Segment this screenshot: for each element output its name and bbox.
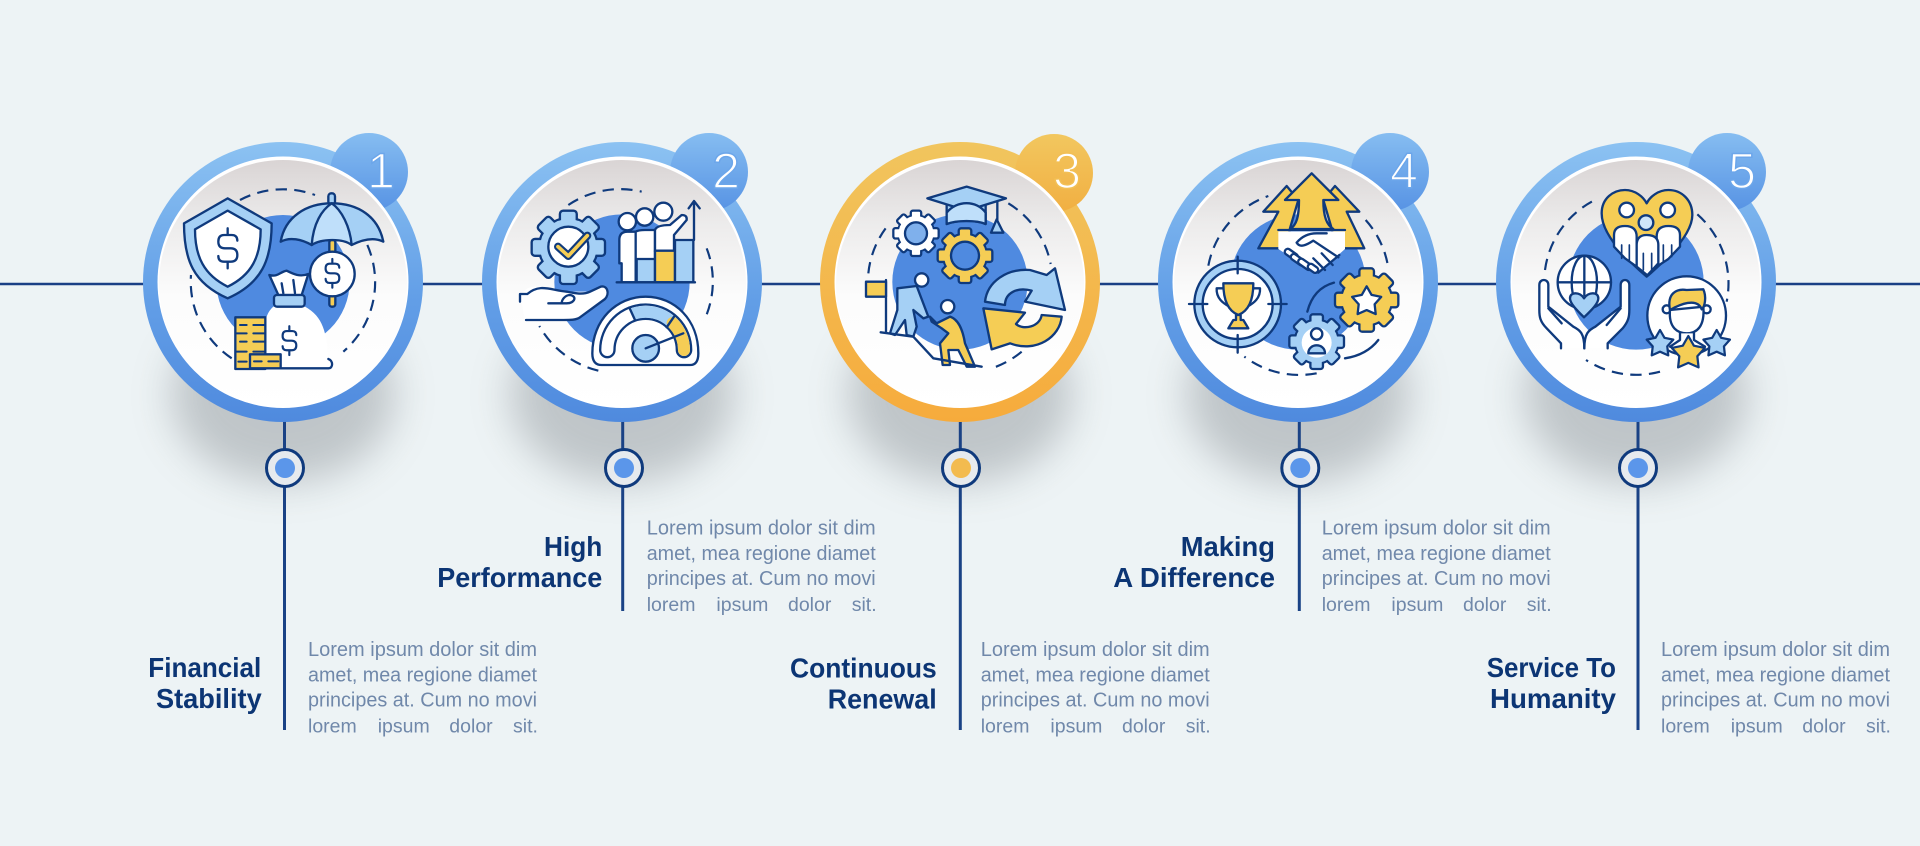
step 5 description: lorem	[1661, 716, 1710, 738]
step 4 description	[1322, 517, 1552, 616]
step 1 description: Lorem ipsum dolor sit dim	[308, 639, 537, 661]
step 3 description: principes at. Cum no movi	[981, 690, 1210, 712]
step 3 description: dolor	[1122, 716, 1166, 738]
step 1 connector	[283, 415, 286, 730]
step 3 ring	[820, 142, 1100, 422]
step 4 title: Making	[1181, 531, 1275, 562]
step 1 badge: 1	[367, 143, 395, 199]
step 4 description: dolor	[1463, 594, 1507, 616]
step 2 drop shadow	[510, 307, 734, 483]
step 2 description: Lorem ipsum dolor sit dim	[647, 517, 876, 539]
step 4 description: amet, mea regione diamet	[1322, 543, 1551, 565]
step 5 description: amet, mea regione diamet	[1661, 665, 1890, 687]
step 2 badge: 2	[712, 143, 740, 199]
step 5 panel: service to humanity	[1487, 133, 1891, 738]
step 2 description: lorem	[647, 594, 695, 616]
step 1 description: amet, mea regione diamet	[308, 665, 537, 687]
step 1 panel: financial stability	[143, 133, 538, 738]
step 5 title	[1487, 652, 1616, 714]
step 3 badge	[1015, 134, 1093, 212]
step 1 description: lorem	[308, 716, 357, 738]
step 2 title	[437, 531, 602, 593]
step 1 title: Financial	[148, 652, 261, 683]
step 3 description: lorem	[981, 716, 1029, 738]
step 2 badge	[670, 133, 748, 211]
step 5 description: Lorem ipsum dolor sit dim	[1661, 639, 1890, 661]
step 2 title: Performance	[437, 562, 602, 593]
step 3 drop shadow	[848, 307, 1072, 483]
icon: shield, umbrella, money bag	[184, 189, 383, 369]
step 5 description: dolor	[1802, 716, 1846, 738]
step 2 description	[647, 517, 877, 616]
step 1 title	[148, 652, 262, 714]
step 1 drop shadow	[171, 307, 395, 483]
step 1 inner disc	[158, 156, 408, 408]
step 1 description: sit.	[513, 716, 538, 738]
step 3 connector	[959, 415, 962, 730]
step 3 title: Continuous	[790, 652, 937, 683]
step 3 title	[790, 652, 937, 714]
step 4 description: lorem	[1322, 594, 1370, 616]
step 2 panel: high performance	[437, 133, 877, 616]
step 4 description: sit.	[1527, 594, 1552, 616]
step 5 connector	[1636, 415, 1640, 730]
step 1 description: dolor	[449, 716, 493, 738]
step 5 inner disc	[1510, 156, 1762, 408]
step 4 node	[1282, 450, 1319, 486]
step 2 title: High	[544, 531, 602, 562]
step 4 ring	[1158, 142, 1438, 422]
step 5 title: Humanity	[1490, 683, 1616, 714]
step 2 ring	[482, 142, 762, 422]
step 5 description	[1661, 639, 1891, 738]
step 5 node	[1620, 450, 1656, 486]
step 3 node	[942, 450, 980, 486]
step 2 description: dolor	[788, 594, 832, 616]
step 4 drop shadow	[1186, 307, 1410, 483]
horizontal timeline line	[0, 283, 1920, 285]
step 1 ring	[143, 142, 423, 422]
step 4 badge	[1351, 133, 1429, 211]
step 2 description: sit.	[852, 594, 877, 616]
step 3 inner disc	[834, 156, 1086, 408]
step 1 description: ipsum	[378, 716, 430, 738]
step 4 title: A Difference	[1113, 562, 1275, 593]
step 1 badge	[330, 133, 408, 211]
step 1 node	[266, 450, 304, 486]
step 1 title: Stability	[156, 683, 262, 714]
step 5 description: sit.	[1866, 716, 1891, 738]
step 2 node	[606, 450, 642, 486]
step 1 description	[308, 639, 538, 738]
step 3 description: ipsum	[1050, 716, 1102, 738]
step 2 inner disc	[496, 156, 748, 408]
step 3 description	[981, 639, 1211, 738]
step 3 panel: continuous renewal	[790, 134, 1211, 738]
step 4 description: Lorem ipsum dolor sit dim	[1322, 517, 1551, 539]
step 2 description: principes at. Cum no movi	[647, 568, 876, 590]
step 2 description: ipsum	[716, 594, 768, 616]
step 5 drop shadow	[1524, 307, 1748, 483]
step 3 description: Lorem ipsum dolor sit dim	[981, 639, 1210, 661]
step 1 description: principes at. Cum no movi	[308, 690, 537, 712]
step 3 description: sit.	[1186, 716, 1211, 738]
step 4 panel: making a difference	[1113, 133, 1552, 616]
step 3 description: amet, mea regione diamet	[981, 665, 1210, 687]
icon: family heart, globe in hands, person with stars	[1539, 190, 1730, 375]
step 4 connector	[1298, 415, 1301, 611]
step 5 badge: 5	[1728, 143, 1756, 199]
step 4 description: ipsum	[1391, 594, 1443, 616]
step 3 badge: 3	[1053, 143, 1081, 199]
step 4 inner disc	[1172, 156, 1424, 408]
step 5 description: ipsum	[1731, 716, 1783, 738]
step 5 badge	[1688, 133, 1766, 211]
step 5 description: principes at. Cum no movi	[1661, 690, 1890, 712]
step 2 connector	[621, 415, 624, 611]
icon: arrows, handshake, trophy target, gears	[1189, 173, 1398, 375]
step 5 title: Service To	[1487, 652, 1616, 683]
step 4 badge: 4	[1390, 143, 1418, 199]
step 4 title	[1113, 531, 1275, 593]
step 3 title: Renewal	[828, 683, 937, 714]
step 5 ring	[1496, 142, 1776, 422]
step 2 description: amet, mea regione diamet	[647, 543, 876, 565]
icon: graduation cap, gears, climbers, renew arrows	[866, 187, 1065, 368]
icon: gear check, team chart, hand, gauge	[520, 189, 713, 371]
step 4 description: principes at. Cum no movi	[1322, 568, 1551, 590]
